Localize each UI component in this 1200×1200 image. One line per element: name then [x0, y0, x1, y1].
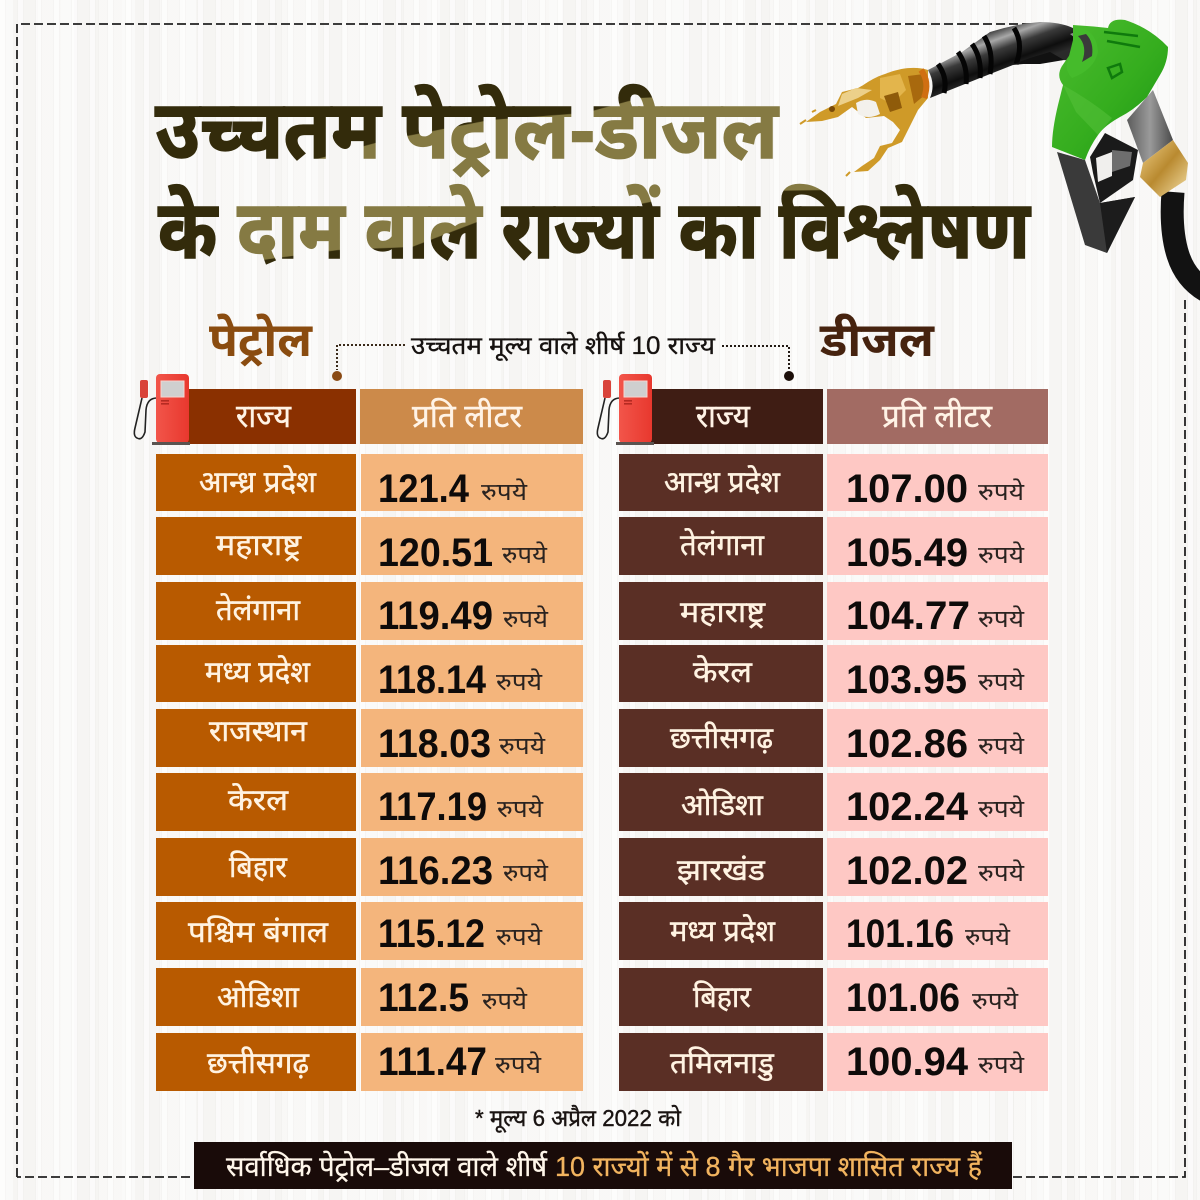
row: Kerala: 117.19 [378, 785, 487, 829]
callout bar [194, 1142, 1012, 1189]
row: Bihar [156, 838, 583, 896]
row: Jharkhand: झारखंड [677, 854, 766, 887]
row: Chhattisgarh: छत्तीसगढ़ [207, 1046, 310, 1080]
row: Odisha [619, 773, 1048, 831]
row: Madhya Pradesh: रुपये [965, 923, 1011, 951]
row: Maharashtra [156, 517, 583, 575]
row: Andhra Pradesh: रुपये [978, 478, 1025, 506]
row: Tamil Nadu [619, 1033, 1048, 1091]
row: Andhra Pradesh: रुपये [481, 478, 528, 506]
row: Jharkhand: रुपये [978, 859, 1025, 887]
row: Bihar: 116.23 [378, 849, 493, 893]
row: Andhra Pradesh: 121.4 [378, 467, 470, 511]
row: Maharashtra [619, 582, 1048, 640]
row: Chhattisgarh: 102.86 [846, 722, 968, 766]
row: Andhra Pradesh [619, 454, 1048, 511]
row: Madhya Pradesh: रुपये [496, 668, 543, 696]
row: Telangana [619, 517, 1048, 575]
row: Jharkhand: 102.02 [846, 849, 968, 893]
icon: gold collar [1140, 140, 1188, 197]
row: Odisha: 102.24 [846, 785, 969, 829]
row: Odisha: रुपये [482, 987, 528, 1015]
row: Bihar: बिहार [693, 980, 752, 1014]
row: Andhra Pradesh: 107.00 [846, 467, 968, 511]
row: Tamil Nadu: 100.94 [846, 1040, 969, 1084]
row: Madhya Pradesh [156, 645, 583, 702]
row: Maharashtra: रुपये [978, 605, 1025, 633]
row: Kerala: रुपये [978, 668, 1025, 696]
diesel header: state [650, 389, 823, 444]
title: के दाम वाले राज्यों का विश्लेषण [158, 184, 1032, 276]
illustration: green fuel nozzle with splash [800, 20, 1200, 292]
row: Telangana: रुपये [978, 541, 1025, 569]
diesel header: state: राज्य [696, 398, 751, 434]
petrol header: state [186, 389, 356, 444]
connector: diesel [722, 346, 794, 381]
row: Madhya Pradesh [619, 902, 1048, 960]
row: West Bengal [156, 902, 583, 960]
row: Kerala [619, 645, 1048, 702]
petrol header: per litre [360, 389, 583, 444]
row: West Bengal: रुपये [496, 923, 543, 951]
row: Odisha: 112.5 [378, 976, 469, 1020]
callout bar: सर्वाधिक पेट्रोल–डीजल वाले शीर्ष [226, 1150, 548, 1183]
row: Kerala: केरल [228, 782, 289, 817]
row: Rajasthan: रुपये [499, 732, 546, 760]
row: Rajasthan: राजस्थान [209, 715, 308, 748]
row: Odisha: रुपये [978, 795, 1025, 823]
row: Maharashtra: 120.51 [378, 531, 493, 575]
row: Madhya Pradesh: 101.16 [846, 912, 954, 956]
row: Chhattisgarh [156, 1033, 583, 1091]
row: West Bengal: पश्चिम बंगाल [188, 915, 329, 949]
panel: petrol table [134, 374, 583, 1091]
row: Rajasthan: 118.03 [378, 722, 491, 766]
footnote: * मूल्य 6 अप्रैल 2022 को [475, 1105, 682, 1133]
row: Andhra Pradesh: आन्ध्र प्रदेश [199, 464, 317, 499]
row: Madhya Pradesh: मध्य प्रदेश [670, 913, 776, 948]
icon: green body [1052, 20, 1168, 160]
icon: nozzle spout [928, 22, 1092, 98]
row: Maharashtra: रुपये [502, 541, 548, 569]
petrol header: state: राज्य [236, 398, 292, 434]
icon: black handle [1057, 133, 1138, 253]
icon: petrol pump [134, 374, 190, 445]
icon: diesel pump [597, 374, 654, 445]
row: Telangana: रुपये [503, 605, 549, 633]
row: Andhra Pradesh: आन्ध्र प्रदेश [664, 464, 781, 499]
row: Chhattisgarh: रुपये [978, 732, 1025, 760]
row: Maharashtra: 104.77 [846, 594, 970, 638]
row: Jharkhand [619, 838, 1048, 896]
row: Telangana: 105.49 [846, 531, 968, 575]
callout bar: 10 राज्यों में से 8 गैर भाजपा शासित राज्य हैं [555, 1150, 983, 1182]
row: Madhya Pradesh: 118.14 [378, 658, 487, 702]
row: Chhattisgarh: रुपये [495, 1051, 542, 1079]
row: Tamil Nadu: रुपये [978, 1051, 1025, 1079]
row: Odisha [156, 968, 583, 1026]
diesel header: per litre [827, 389, 1048, 444]
row: Odisha: ओडिशा [681, 788, 764, 822]
panel: diesel table [597, 374, 1048, 1091]
row: West Bengal: 115.12 [378, 912, 485, 956]
title [155, 84, 1032, 276]
row: Kerala: रुपये [497, 795, 544, 823]
subtitle: उच्चतम मूल्य वाले शीर्ष 10 राज्य [411, 330, 716, 361]
connector: petrol [332, 345, 405, 381]
row: Rajasthan [156, 709, 583, 767]
row: Telangana: तेलंगाना [216, 592, 301, 627]
row: Kerala: केरल [693, 654, 753, 689]
icon: metal neck [1127, 90, 1173, 163]
row: Andhra Pradesh [156, 454, 583, 511]
row: Odisha: ओडिशा [217, 980, 300, 1014]
row: Bihar: रुपये [503, 859, 549, 887]
row: Madhya Pradesh: मध्य प्रदेश [205, 654, 311, 689]
row: Tamil Nadu: तमिलनाडु [670, 1046, 775, 1081]
row: Telangana: 119.49 [378, 594, 493, 638]
row: Kerala: 103.95 [846, 658, 967, 702]
row: Chhattisgarh [619, 709, 1048, 767]
diesel header: per litre: प्रति लीटर [882, 398, 993, 434]
row: Bihar: रुपये [972, 987, 1019, 1015]
petrol header: per litre: प्रति लीटर [412, 398, 523, 434]
heading: petrol: पेट्रोल [209, 313, 313, 367]
row: Telangana [156, 582, 583, 640]
title: उच्चतम पेट्रोल-डीजल [155, 84, 779, 177]
row: Bihar: बिहार [229, 850, 288, 884]
row: Maharashtra: महाराष्ट्र [216, 529, 302, 562]
row: Bihar: 101.06 [846, 976, 960, 1020]
row: Chhattisgarh: 111.47 [378, 1040, 487, 1084]
heading: diesel: डीजल [819, 313, 935, 366]
icon: fuel splash [800, 68, 928, 176]
row: Maharashtra: महाराष्ट्र [680, 596, 766, 629]
row: Bihar [619, 968, 1048, 1026]
row: Telangana: तेलंगाना [680, 527, 765, 562]
icon: hose [1172, 192, 1200, 292]
row: Chhattisgarh: छत्तीसगढ़ [670, 721, 774, 755]
row: Kerala [156, 773, 583, 831]
